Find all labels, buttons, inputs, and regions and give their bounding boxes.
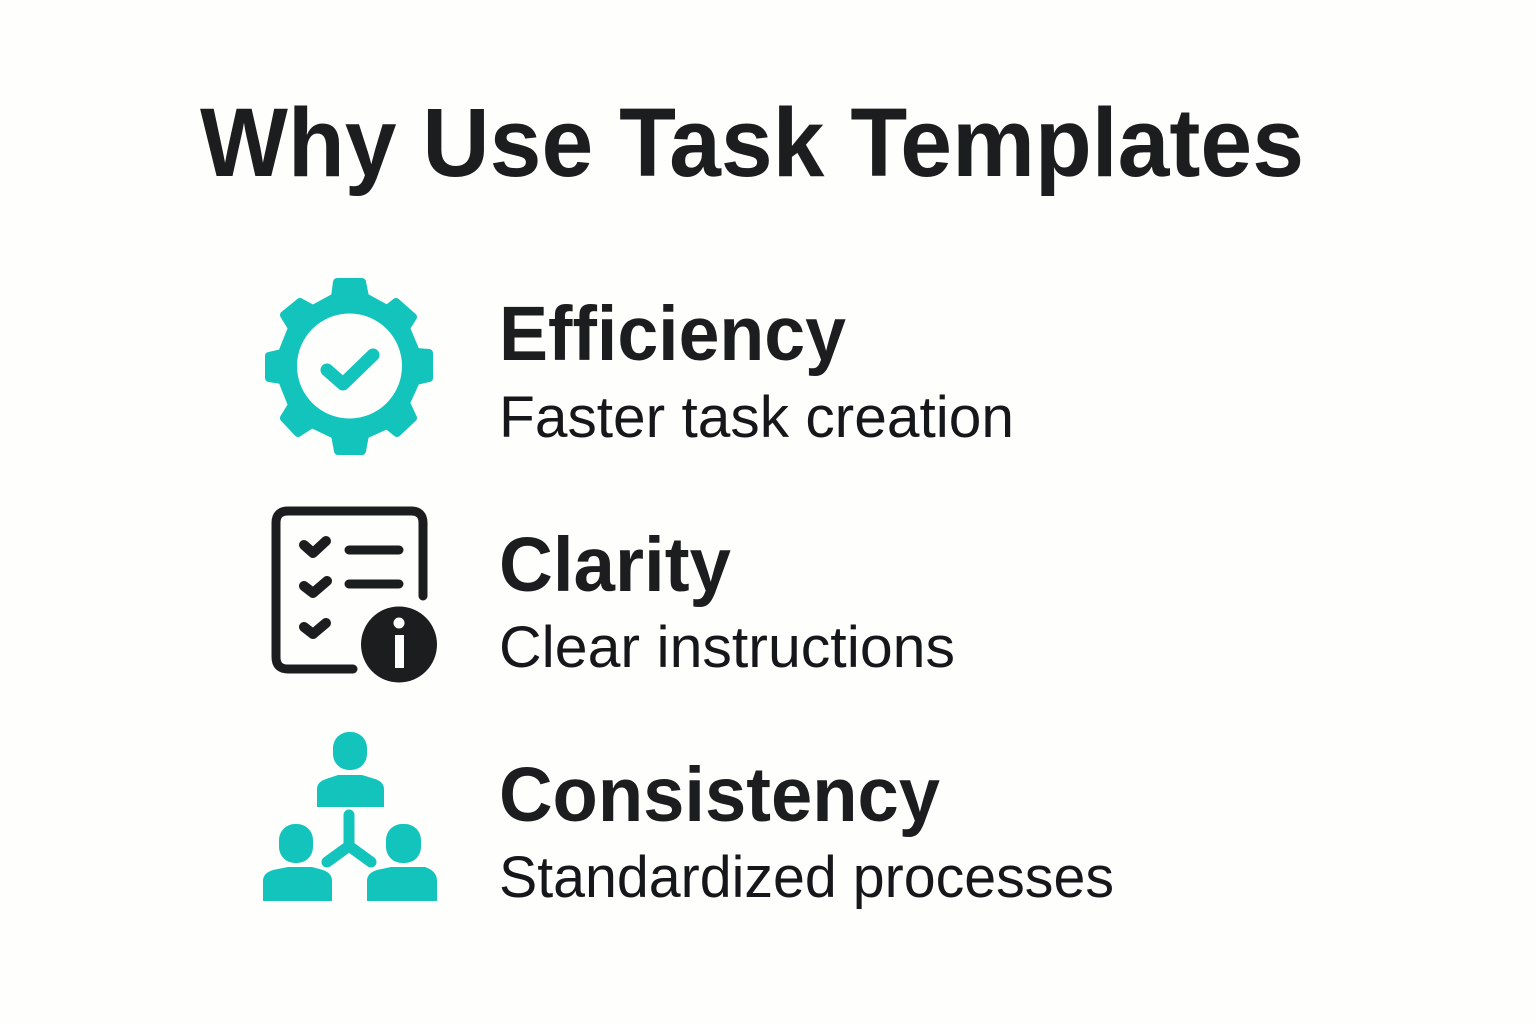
title: Why Use Task Templates [200,88,1304,197]
icon: gear with check mark [269,282,429,451]
row: efficiency [269,282,1014,451]
row: clarity [276,511,955,682]
heading: Clarity: Clarity [499,522,731,608]
heading: Consistency: Consistency [499,752,940,838]
icon: three connected people [263,732,437,901]
row: consistency [263,732,1114,910]
description: Faster task creation: Faster task creation [499,385,1014,450]
description: Clear instructions: Clear instructions [499,615,955,680]
heading: Efficiency: Efficiency [499,291,846,377]
icon: checklist with info badge [276,511,437,682]
description: Standardized processes: Standardized processes [499,845,1114,910]
